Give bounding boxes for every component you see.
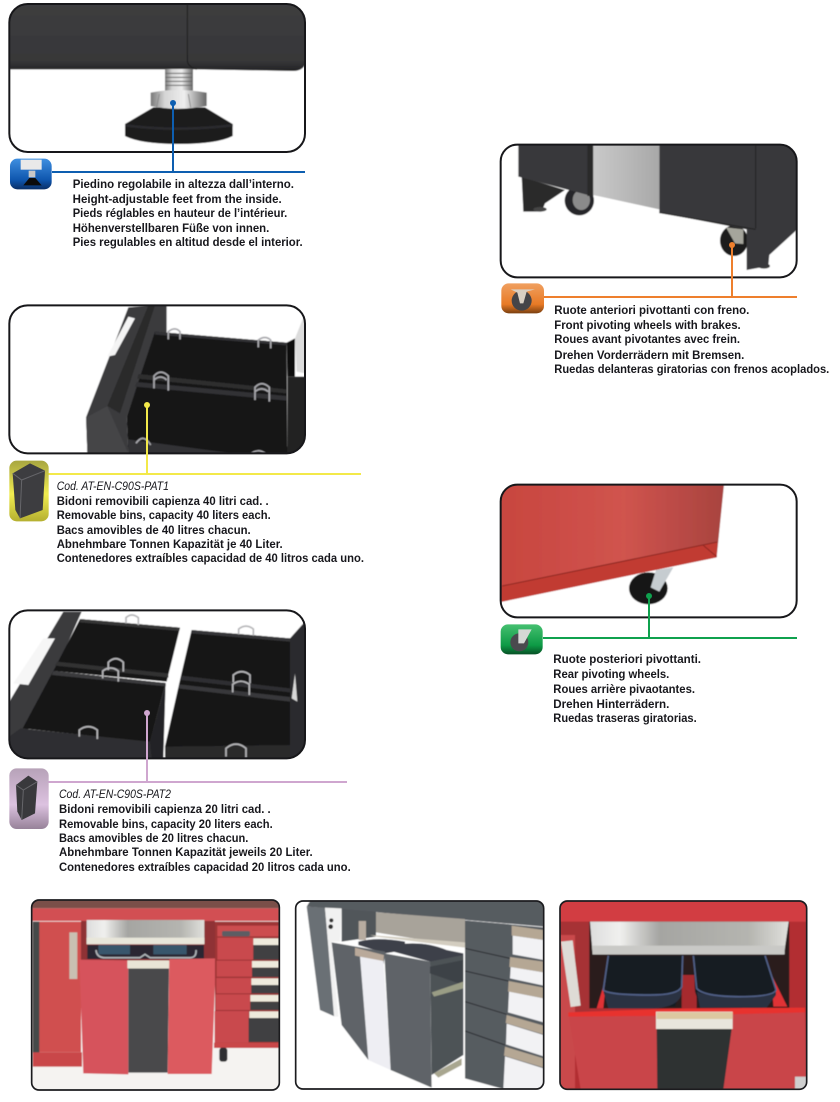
panel: height-adjustable foot: [9, 4, 305, 249]
text: 40 litre bins: Abnehmbare Tonnen Kapazität je 40 Liter.: [57, 539, 283, 551]
icon: wheel on green badge: [501, 624, 543, 654]
text: 20 litre bins: [59, 789, 351, 874]
text: 40 litre bins: [57, 481, 364, 565]
callout dot: green: [646, 593, 652, 599]
photo: front wheels: [501, 145, 797, 277]
text: front wheels: Ruedas delanteras giratorias con frenos acoplados.: [554, 364, 829, 376]
text: 20 litre bins: Abnehmbare Tonnen Kapazität jeweils 20 Liter.: [59, 847, 313, 859]
text: 20 litre bins: Bidoni removibili capienza 20 litri cad. .: [59, 804, 271, 816]
text: rear wheels: Ruedas traseras giratorias.: [553, 713, 697, 725]
photo: rear wheel: [501, 485, 797, 617]
callout dot: orange: [729, 242, 735, 248]
text: 20 litre bins: Bacs amovibles de 20 litres chacun.: [59, 833, 248, 845]
panel: removable bins 20 litres: [9, 610, 351, 874]
text: rear wheels: Ruote posteriori pivottanti.: [553, 654, 701, 666]
callout dot: yellow: [144, 402, 150, 408]
callout line: orange: [544, 245, 797, 297]
callout dot: pink: [144, 710, 150, 716]
callout line: green: [543, 596, 797, 638]
panel: removable bins 40 litres: [9, 305, 364, 565]
photo: adjustable foot: [9, 4, 305, 152]
text: rear wheels: [553, 654, 701, 725]
text: 40 litre bins: Removable bins, capacity 40 liters each.: [57, 510, 271, 522]
text: 20 litre bins: Removable bins, capacity 20 liters each.: [59, 819, 273, 831]
text: front wheels: Ruote anteriori pivottanti con freno.: [554, 305, 749, 317]
callout line: blue: [52, 103, 305, 172]
text: front wheels: Roues avant pivotantes avec frein.: [554, 334, 740, 346]
text: front wheels: Drehen Vorderrädern mit Bremsen.: [554, 350, 744, 362]
photo: red cabinet with bins closed: [32, 900, 279, 1090]
text: foot description: Höhenverstellbaren Füße von innen.: [73, 223, 269, 235]
text: rear wheels: Drehen Hinterrädern.: [553, 699, 669, 711]
text: front wheels: Front pivoting wheels with brakes.: [554, 320, 741, 332]
text: foot description: Pieds réglables en hauteur de l’intérieur.: [73, 208, 287, 220]
text: 20 litre bins: Contenedores extraíbles capacidad 20 litros cada uno.: [59, 862, 351, 874]
panel: front pivoting wheels: [501, 145, 829, 376]
text: foot description: [73, 179, 303, 249]
photo: 40 litre bins: [9, 305, 305, 453]
text: 40 litre bins: Bidoni removibili capienza 40 litri cad. .: [57, 496, 269, 508]
text: foot description: Piedino regolabile in altezza dall’interno.: [73, 179, 294, 191]
text: 40 litre bins: Cod. AT-EN-C90S-PAT1: [57, 481, 169, 493]
callout dot: blue: [170, 100, 176, 106]
icon: tall bin on yellow badge: [9, 461, 49, 521]
text: 20 litre bins: Cod. AT-EN-C90S-PAT2: [59, 789, 172, 801]
icon: wheel on orange badge: [501, 283, 544, 313]
text: front wheels: [554, 305, 829, 376]
text: foot description: Pies regulables en altitud desde el interior.: [73, 237, 303, 249]
panel: rear pivoting wheels: [501, 485, 797, 725]
icon: small bin on pink badge: [9, 768, 49, 829]
photo: red cabinet bins close-up: [560, 901, 807, 1089]
callout line: yellow: [48, 405, 361, 474]
icon: foot on blue badge: [10, 159, 52, 189]
text: 40 litre bins: Bacs amovibles de 40 litres chacun.: [57, 525, 251, 537]
text: foot description: Height-adjustable feet from the inside.: [73, 194, 282, 206]
photo: grey cabinet with bin drawer open: [296, 901, 544, 1089]
photo: 20 litre bins: [9, 610, 305, 758]
text: rear wheels: Rear pivoting wheels.: [553, 669, 669, 681]
text: rear wheels: Roues arrière pivaotantes.: [553, 684, 695, 696]
text: 40 litre bins: Contenedores extraíbles capacidad de 40 litros cada uno.: [57, 553, 364, 565]
callout line: pink: [48, 713, 347, 782]
